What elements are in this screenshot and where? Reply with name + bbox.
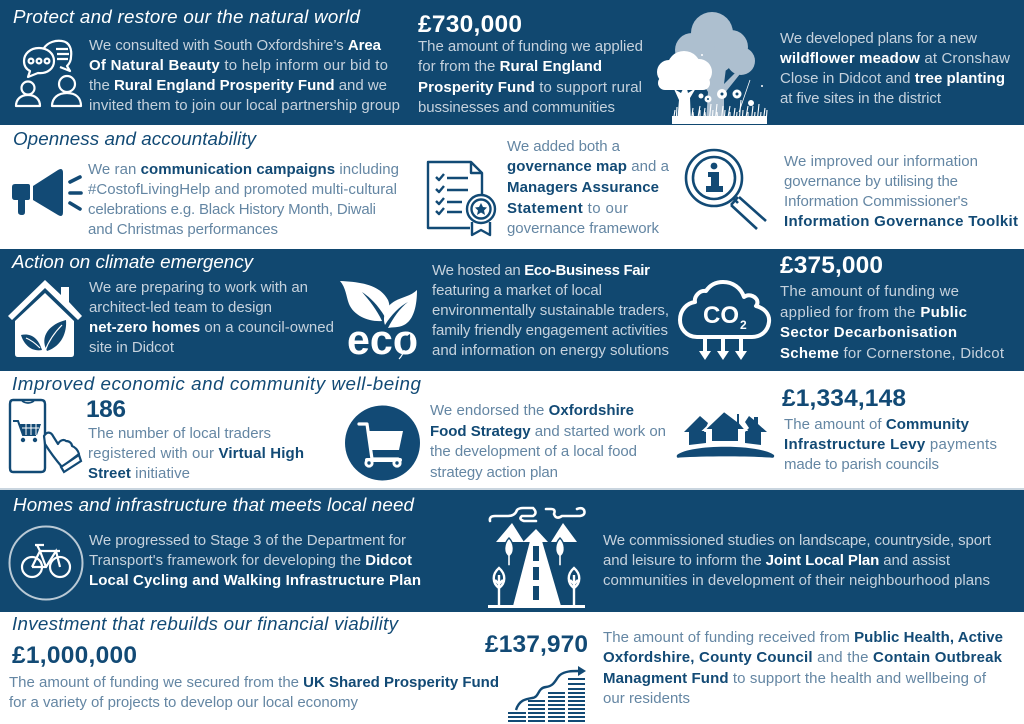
stat: £1,000,000: £1,000,000	[12, 642, 137, 669]
stat: £1,334,148: The amount of Community	[784, 416, 970, 433]
text: joint local plan: We commissioned studies on landscape, countryside, sport	[603, 532, 992, 549]
stat: £375,000: applied for from the Public	[780, 304, 967, 321]
stat: £1,000,000	[9, 642, 499, 711]
icon: eco leaves	[340, 281, 418, 363]
stat: 186 traders: The number of local traders	[88, 425, 271, 442]
text: communication campaigns	[88, 161, 399, 238]
stat: £375,000: Scheme for Cornerstone, Didcot	[780, 345, 1005, 362]
icon: road with trees and hills	[488, 508, 585, 608]
text: communication campaigns: We ran communication campaigns including	[88, 161, 399, 178]
panel: financial viability	[0, 612, 1024, 724]
text: information governance: Information Commissioner's	[784, 193, 968, 210]
text: area of natural beauty: the Rural England Prosperity Fund and we	[89, 77, 387, 94]
stat: £137,970: £137,970	[485, 631, 588, 658]
text: governance map: Statement to our	[507, 200, 628, 217]
icon: rising stacks with arrow	[508, 666, 586, 722]
text: public health funding: Managment Fund to support the health and wellbeing of	[603, 670, 987, 687]
stat: £730,000: £730,000	[418, 11, 522, 38]
stat: £1,334,148: £1,334,148	[782, 385, 906, 412]
text: public health funding: our residents	[603, 690, 690, 707]
text: governance map: We added both a	[507, 138, 621, 155]
text: information governance: We improved our information	[784, 153, 978, 170]
text: net-zero homes: net-zero homes on a council-owned	[89, 319, 334, 336]
stat: £375,000: £375,000	[780, 252, 883, 279]
text: net-zero homes: We are preparing to work with an	[89, 279, 308, 296]
icon: bicycle	[10, 526, 82, 600]
text: oxfordshire food strategy	[430, 402, 666, 481]
stat: £1,334,148: made to parish councils	[784, 456, 939, 473]
icon: certified document	[428, 162, 495, 235]
text: joint local plan: communities in development of their neighbourhood plans	[603, 572, 990, 589]
text: oxfordshire food strategy: We endorsed the Oxfordshire	[430, 402, 634, 419]
text: information governance: governance by utilising the	[784, 173, 958, 190]
text: wildflower meadow: We developed plans for a new	[780, 30, 977, 47]
text: wildflower meadow: Close in Didcot and tree planting	[780, 70, 1005, 87]
text: eco-business fair: and information on energy solutions	[432, 342, 669, 359]
stat: £730,000: bussinesses and communities	[418, 99, 615, 116]
text: wildflower meadow: wildflower meadow at Cronshaw	[779, 50, 1010, 67]
text: area of natural beauty: invited them to join our local partnership group	[89, 97, 400, 114]
text: eco-business fair: We hosted an Eco-Business Fair	[432, 262, 650, 279]
text: public health funding: The amount of funding received from Public Health, Active	[603, 629, 1003, 646]
text: communication campaigns: celebrations e.g. Black History Month, Diwali	[88, 201, 376, 218]
text: communication campaigns: #CostofLivingHelp and promoted multi-cultural	[88, 181, 397, 198]
panel: economic and community well-being	[0, 371, 1024, 490]
heading: improved economic and community well-being: Improved economic and community well-being	[12, 373, 422, 394]
text: oxfordshire food strategy: the development of a local food	[430, 443, 637, 460]
text: cycling and walking plan: We progressed to Stage 3 of the Department for	[89, 532, 406, 549]
panel: openness and accountability	[0, 125, 1024, 249]
text: eco-business fair: environmentally sustainable traders,	[432, 302, 669, 319]
icon: CO2 cloud: CO	[703, 302, 739, 329]
text: information governance: Information Governance Toolkit	[784, 213, 1018, 230]
icon: CO2 cloud: 2	[740, 318, 747, 332]
stat: 186 traders: registered with our Virtual High	[88, 445, 304, 462]
stat: 186 traders: Street initiative	[88, 465, 190, 482]
stat: £1,334,148: Infrastructure Levy payments	[784, 436, 997, 453]
text: net-zero homes: site in Didcot	[89, 339, 175, 356]
stat: £375,000: Sector Decarbonisation	[780, 324, 957, 341]
text: area of natural beauty	[89, 37, 400, 114]
stat: £1,334,148	[782, 385, 997, 473]
stat: £1,000,000: The amount of funding we secured from the UK Shared Prosperity Fund	[9, 674, 499, 691]
text: oxfordshire food strategy: Food Strategy and started work on	[430, 423, 666, 440]
heading: homes and infrastructure: Homes and infrastructure that meets local need	[13, 494, 415, 515]
icon: eco house	[8, 280, 82, 357]
text: area of natural beauty: We consulted with South Oxfordshire’s Area	[89, 37, 382, 54]
text: communication campaigns: and Christmas performances	[88, 221, 278, 238]
stat: 186 traders	[86, 396, 304, 482]
icon: magnifying glass with information symbol	[686, 150, 766, 229]
text: governance map	[507, 138, 670, 237]
heading: investment that rebuilds our financial viability: Investment that rebuilds our financial viability	[12, 613, 400, 634]
icon: eco leaves: eco	[347, 316, 418, 363]
text: public health funding: Oxfordshire, County Council and the Contain Outbreak	[603, 649, 1003, 666]
text: governance map: Managers Assurance	[507, 179, 659, 196]
heading: openness and accountability: Openness and accountability	[13, 128, 258, 149]
icon: CO2 cloud	[680, 282, 769, 360]
stat: £730,000: for from the Rural England	[418, 58, 602, 75]
text: cycling and walking plan	[89, 532, 421, 589]
text: governance map: governance framework	[507, 220, 660, 237]
text: net-zero homes: architect-led team to design	[89, 299, 272, 316]
panel: action on climate emergency	[0, 249, 1024, 371]
text: public health funding	[603, 629, 1003, 707]
icon: trees and wildflowers	[657, 12, 767, 124]
text: governance map: governance map and a	[507, 158, 670, 175]
stat: 186 traders: 186	[86, 396, 126, 423]
icon: people in conversation	[16, 41, 81, 106]
heading: action on climate emergency: Action on climate emergency	[11, 251, 255, 272]
stat: £730,000: Prosperity Fund to support rural	[418, 79, 642, 96]
text: cycling and walking plan: Transport's framework for developing the Didcot	[89, 552, 412, 569]
icon: megaphone	[12, 169, 81, 216]
text: cycling and walking plan: Local Cycling and Walking Infrastructure Plan	[89, 572, 421, 589]
text: eco-business fair: featuring a market of local	[432, 282, 602, 299]
text: joint local plan	[603, 532, 992, 589]
stat: £375,000: The amount of funding we	[780, 283, 959, 300]
stat: £1,000,000: for a variety of projects to develop our local economy	[9, 694, 358, 711]
text: wildflower meadow: at five sites in the district	[780, 90, 942, 107]
panel: protect and restore	[0, 0, 1024, 125]
text: eco-business fair: family friendly engagement activities	[432, 322, 668, 339]
text: net-zero homes	[89, 279, 334, 356]
text: wildflower meadow	[779, 30, 1010, 107]
stat: £375,000	[780, 252, 1005, 362]
text: area of natural beauty: Of Natural Beauty to help inform our bid to	[89, 57, 388, 74]
icon: phone with shopping cart and hand	[10, 400, 81, 472]
text: eco-business fair	[432, 262, 669, 359]
stat: £730,000	[418, 11, 643, 116]
heading: protect and restore: Protect and restore our the natural world	[13, 6, 361, 27]
panel: homes and infrastructure	[0, 490, 1024, 612]
stat: £730,000: The amount of funding we applied	[418, 38, 643, 55]
text: joint local plan: and leisure to inform the Joint Local Plan and assist	[603, 552, 951, 569]
icon: houses on a hill	[677, 411, 774, 458]
text: oxfordshire food strategy: strategy action plan	[430, 464, 558, 481]
text: information governance	[784, 153, 1018, 230]
icon: shopping cart	[345, 406, 420, 480]
